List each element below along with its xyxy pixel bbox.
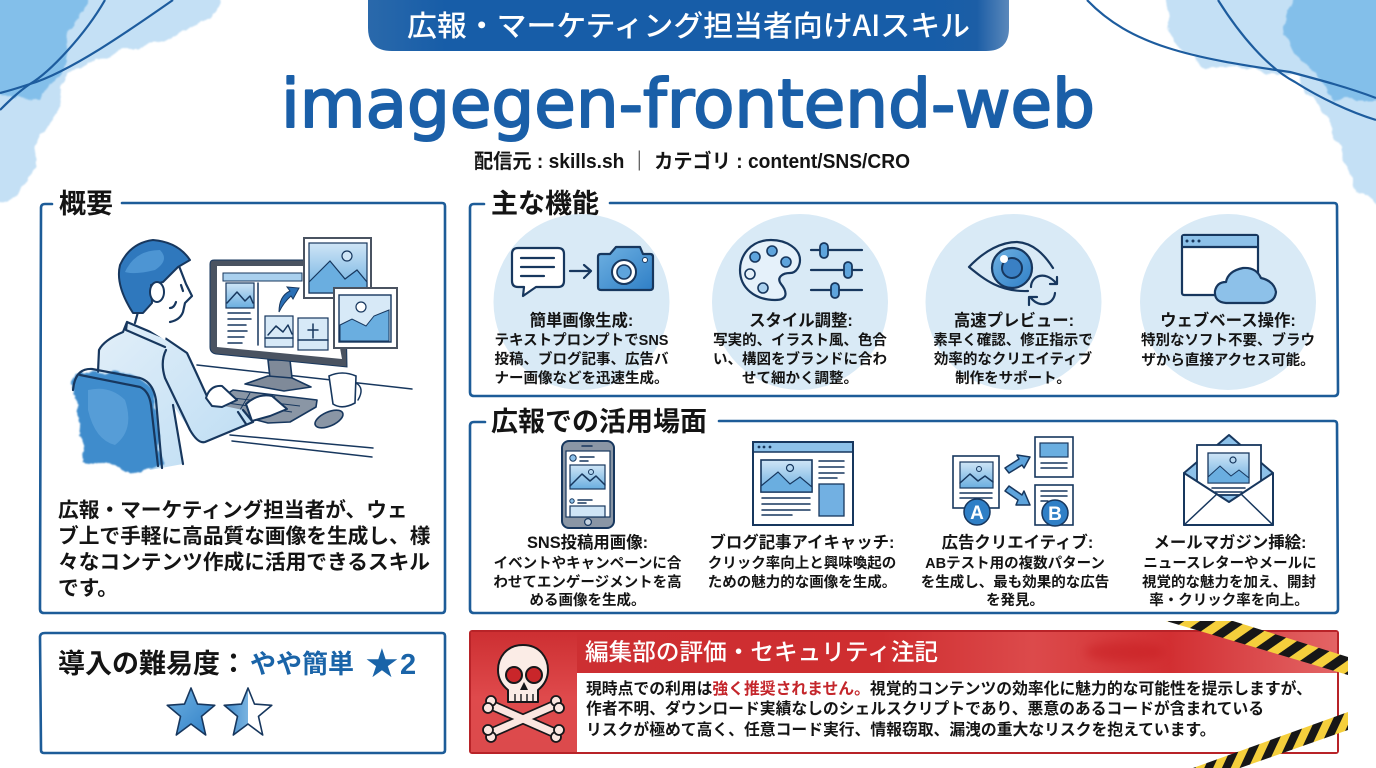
text: SNS投稿用画像: (527, 533, 648, 552)
icon: half star (224, 688, 272, 735)
text: 簡単画像生成: (530, 311, 633, 330)
panel: overview (40, 189, 445, 613)
text: を発見。 (986, 591, 1044, 609)
text: ニュースレターやメールに (1143, 555, 1317, 572)
overview text (58, 498, 431, 600)
feature: web based (1140, 214, 1316, 390)
text: 広告クリエイティブ: (942, 533, 1093, 552)
icon: envelope with image (1184, 435, 1273, 525)
overview text: 広報・マーケティング担当者が、ウェ (58, 498, 408, 522)
text: ABテスト用の複数パターン (925, 554, 1105, 572)
panel: editorial security note (470, 631, 1338, 753)
title: imagegen-frontend-web (281, 65, 1095, 143)
watercolor wash: top left (0, 0, 240, 215)
subtitle: 配信元 : skills.sh ｜ カテゴリ : content/SNS/CRO (474, 149, 910, 173)
watercolor wash: top right (1087, 0, 1376, 208)
text: い、構図をブランドに合わ (713, 350, 887, 368)
icon: eye and refresh (969, 242, 1057, 305)
icon: smartphone (562, 441, 614, 528)
office chair (73, 369, 162, 472)
text: ザから直接アクセス可能。 (1141, 351, 1315, 369)
overview text: です。 (58, 577, 118, 600)
text: 投稿、ブログ記事、広告バ (494, 350, 669, 368)
text: 高速プレビュー: (954, 311, 1074, 330)
text: 素早く確認、修正指示で (933, 331, 1093, 349)
text: 効率的なクリエイティブ (934, 350, 1093, 368)
use case: SNS (493, 441, 682, 609)
icon: AB test documents: B (1048, 504, 1062, 525)
floating pictures (304, 238, 397, 348)
difficulty label: やや簡単 (250, 649, 354, 679)
monitor (210, 260, 347, 391)
text: せて細かく調整。 (742, 369, 858, 387)
keyboard, mug and mouse (207, 373, 361, 431)
text: ブログ記事アイキャッチ: (710, 533, 894, 552)
text: わせてエンゲージメントを高 (493, 573, 682, 591)
feature: simple generation (494, 214, 670, 390)
note body: 現時点での利用は強く推奨されません。視覚的コンテンツの効率化に魅力的な可能性を提示しますが、 (586, 679, 1312, 698)
overview text: 々なコンテンツ作成に活用できるスキル (58, 550, 430, 574)
person (98, 240, 287, 470)
note heading: 編集部の評価・セキュリティ注記 (585, 633, 938, 667)
text (921, 533, 1109, 609)
heading: use cases: 広報での活用場面 (491, 407, 707, 437)
difficulty label: 導入の難易度： (58, 649, 247, 679)
text (1142, 534, 1317, 609)
difficulty rating text: 2 (400, 649, 416, 681)
icon: AB test documents: A (970, 503, 984, 524)
text (708, 533, 896, 591)
difficulty rating text: ★ (364, 641, 400, 687)
text: 視覚的な魅力を加え、開封 (1142, 573, 1316, 591)
text: ナー画像などを迅速生成。 (494, 369, 668, 387)
illustration: person at computer (73, 238, 412, 472)
icon: chat to camera (512, 247, 653, 296)
overview text: ブ上で手軽に高品質な画像を生成し、様 (58, 524, 431, 548)
icon: AB test documents (953, 437, 1073, 526)
panel: difficulty (40, 633, 445, 753)
panel: use cases (470, 407, 1338, 613)
text: 特別なソフト不要、ブラウ (1141, 331, 1315, 349)
text (713, 312, 887, 387)
text: 制作をサポート。 (955, 370, 1071, 387)
text: イベントやキャンペーンに合 (494, 555, 682, 572)
text: める画像を生成。 (530, 591, 646, 609)
feature: fast preview (926, 214, 1102, 390)
text (493, 533, 682, 609)
text: スタイル調整: (749, 312, 853, 330)
top banner: 広報・マーケティング担当者向けAIスキル (407, 3, 970, 45)
text (933, 311, 1093, 387)
caution tape: bottom (1193, 712, 1348, 768)
note body (577, 673, 1337, 752)
note body: 作者不明、ダウンロード実績なしのシェルスクリプトであり、悪意のあるコードが含まれている (586, 699, 1264, 718)
text: ウェブベース操作: (1160, 311, 1296, 330)
caution tape: top (1166, 621, 1348, 675)
text: を生成し、最も効果的な広告 (921, 573, 1109, 591)
feature: style adjustment (712, 214, 888, 390)
heading: features: 主な機能 (491, 189, 599, 219)
text: クリック率向上と興味喚起の (708, 554, 896, 572)
text: メールマガジン挿絵: (1154, 534, 1306, 552)
note body: リスクが極めて高く、任意コード実行、情報窃取、漏洩の重大なリスクを抱えています。 (586, 720, 1216, 739)
use case: ad creative (921, 437, 1109, 609)
text: テキストプロンプトでSNS (495, 332, 669, 349)
icon: palette and sliders (740, 240, 862, 300)
text (494, 311, 669, 387)
text: 写実的、イラスト風、色合 (713, 331, 887, 349)
icon: window and cloud (1182, 235, 1276, 303)
use case: blog (708, 442, 896, 591)
icon: skull and crossbones (483, 645, 564, 742)
text: 率・クリック率を向上。 (1149, 591, 1309, 609)
text: ための魅力的な画像を生成。 (708, 573, 896, 591)
icon: blog page (753, 442, 853, 525)
icon: full star (167, 688, 215, 735)
heading: overview: 概要 (59, 189, 113, 219)
use case: newsletter (1142, 435, 1317, 609)
text (1141, 311, 1315, 369)
panel: features (470, 189, 1338, 396)
